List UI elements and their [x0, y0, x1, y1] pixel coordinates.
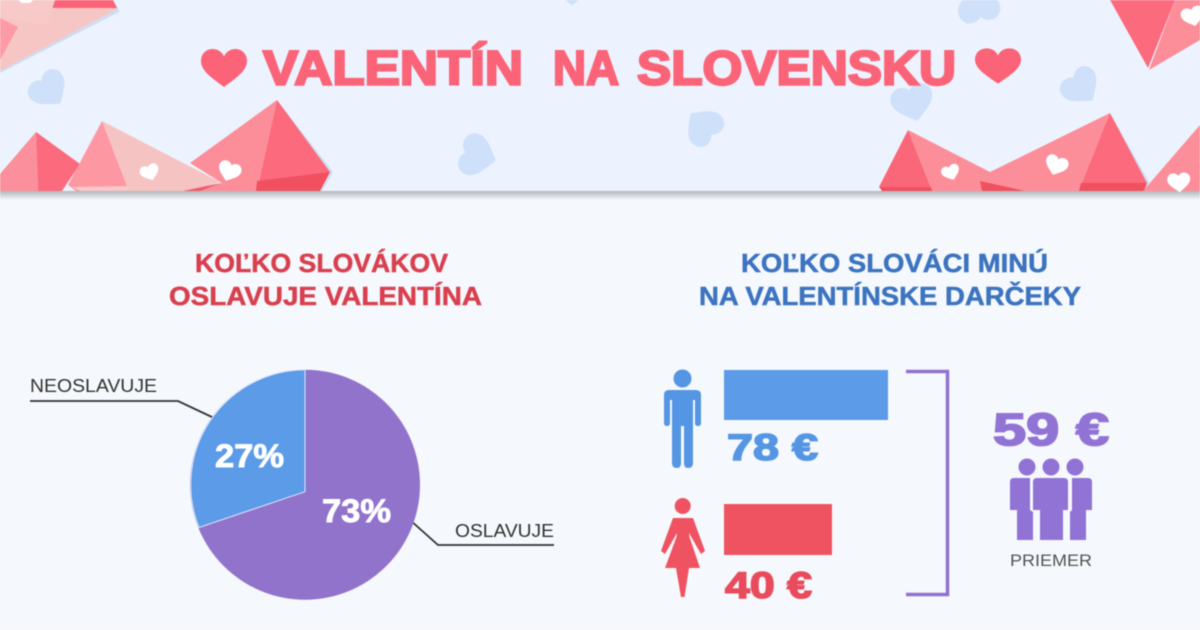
title: NA	[553, 42, 619, 96]
envelopes: bottom right	[879, 113, 1200, 191]
heading: spending: KOĽKO SLOVÁCI MINÚ	[741, 248, 1048, 278]
bracket	[906, 372, 948, 594]
icon: man	[664, 370, 701, 468]
bar: men	[724, 370, 888, 420]
slice: celebrating 73%	[190, 370, 420, 600]
envelopes: bottom left	[0, 100, 333, 191]
title	[263, 42, 956, 96]
value: 78 €: 78 €	[727, 427, 818, 468]
bar: women	[724, 504, 832, 555]
envelope: top left	[0, 0, 119, 73]
icon: envelope hearts left	[139, 159, 243, 184]
value: 73%: 73%	[322, 493, 391, 529]
heading: spending	[699, 248, 1081, 311]
icon: title heart left	[201, 49, 247, 87]
heading: celebrating	[169, 248, 482, 311]
label: oslavuje: OSLAVUJE	[455, 521, 554, 541]
title: VALENTÍN	[263, 42, 523, 96]
value: 27%: 27%	[215, 438, 284, 474]
icon: woman	[661, 498, 705, 597]
slice: not celebrating 27%	[191, 370, 305, 528]
icon: title heart right	[975, 48, 1021, 84]
label: neoslavuje	[30, 376, 214, 418]
label: neoslavuje: NEOSLAVUJE	[30, 376, 157, 396]
icon: envelope hearts right	[940, 5, 1200, 193]
heading: celebrating: KOĽKO SLOVÁKOV	[195, 248, 449, 278]
decorative blue hearts	[26, 0, 1105, 179]
pie chart	[190, 370, 420, 600]
value: 40 €: 40 €	[725, 565, 812, 606]
heading: spending: NA VALENTÍNSKE DARČEKY	[699, 281, 1081, 311]
title: SLOVENSKU	[637, 42, 956, 96]
heading: celebrating: OSLAVUJE VALENTÍNA	[169, 281, 482, 311]
icon: group of people	[1010, 458, 1092, 540]
label: oslavuje	[410, 520, 554, 545]
envelope: top right	[1110, 0, 1200, 70]
panel: header band	[0, 0, 1200, 200]
label: priemer: PRIEMER	[1010, 551, 1092, 570]
value: 59 € average: 59 €	[993, 404, 1109, 455]
